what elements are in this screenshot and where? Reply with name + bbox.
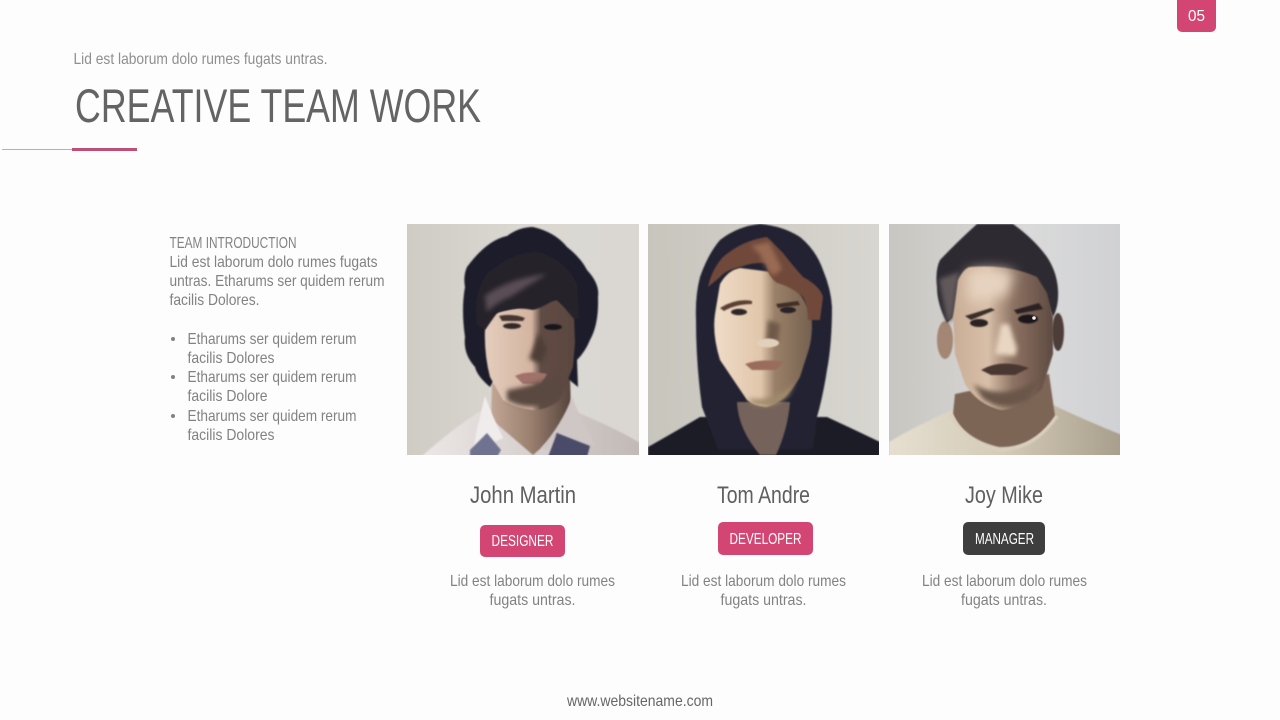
team introduction text block: Etharums ser quidem rerum [188,408,356,425]
team introduction text block: Etharums ser quidem rerum [188,331,356,348]
team introduction text block: facilis Dolores. [170,292,260,309]
role badge [718,522,813,555]
mouth and beard [981,363,1029,375]
team introduction text block: facilis Dolore [188,388,268,405]
page number badge [1177,0,1216,32]
photo: Tom Andre [648,224,880,457]
chin stubble [748,382,796,406]
description: fugats untras. [961,592,1047,609]
team introduction text block: facilis Dolores [188,427,274,444]
neck [491,374,571,455]
hair back [463,227,598,387]
role badge: DEVELOPER [730,531,802,548]
name: Joy Mike [965,482,1043,509]
hair highlight [485,274,547,312]
brows and eyes [720,300,752,311]
hair fringe [476,252,579,330]
name: Tom Andre [717,482,810,509]
hoodie body [648,417,880,457]
mouth and beard [515,372,547,384]
name: John Martin [470,482,576,509]
footer url: www.websitename.com [566,693,713,710]
face [714,268,812,407]
page number badge: 05 [1188,8,1205,25]
face [953,266,1053,410]
nose [995,324,1017,356]
role badge: MANAGER [975,531,1034,548]
team introduction text block [170,235,384,444]
brows and eyes [499,315,525,321]
description: fugats untras. [490,592,576,609]
team introduction text block: Etharums ser quidem rerum [188,369,356,386]
nose [529,332,547,364]
member card: Joy Mike [922,482,1087,609]
neck [737,402,790,455]
face [485,300,575,410]
ears [937,321,953,359]
description: Lid est laborum dolo rumes [922,573,1087,590]
description [922,573,1087,609]
title underline [2,148,137,151]
description: Lid est laborum dolo rumes [450,573,615,590]
brows and eyes [965,308,995,320]
description: fugats untras. [720,592,806,609]
description [681,573,846,609]
hair [936,224,1058,323]
title: CREATIVE TEAM WORK [75,79,481,132]
collar [474,397,503,444]
description: Lid est laborum dolo rumes [681,573,846,590]
team introduction text block: Lid est laborum dolo rumes fugats [170,254,378,271]
description [450,573,615,609]
member card: Tom Andre [681,482,846,609]
role badge: DESIGNER [492,533,554,550]
role badge [480,525,565,557]
team introduction text block: untras. Etharums ser quidem rerum [170,273,384,290]
collar [951,414,1057,450]
team introduction text block: facilis Dolores [188,350,274,367]
member card: John Martin [450,482,615,609]
neck [953,374,1055,447]
forehead highlight [967,269,1014,302]
hood [696,224,832,449]
photo: John Martin [407,224,640,457]
role badge [963,522,1045,555]
subtitle: Lid est laborum dolo rumes fugats untras. [74,51,328,68]
nose [766,320,780,342]
curly hair [708,237,823,320]
photo: Joy Mike [889,224,1122,457]
shirt [421,410,640,457]
team introduction text block: TEAM INTRODUCTION [170,235,296,252]
t-shirt [889,405,1122,457]
mouth [745,360,784,370]
